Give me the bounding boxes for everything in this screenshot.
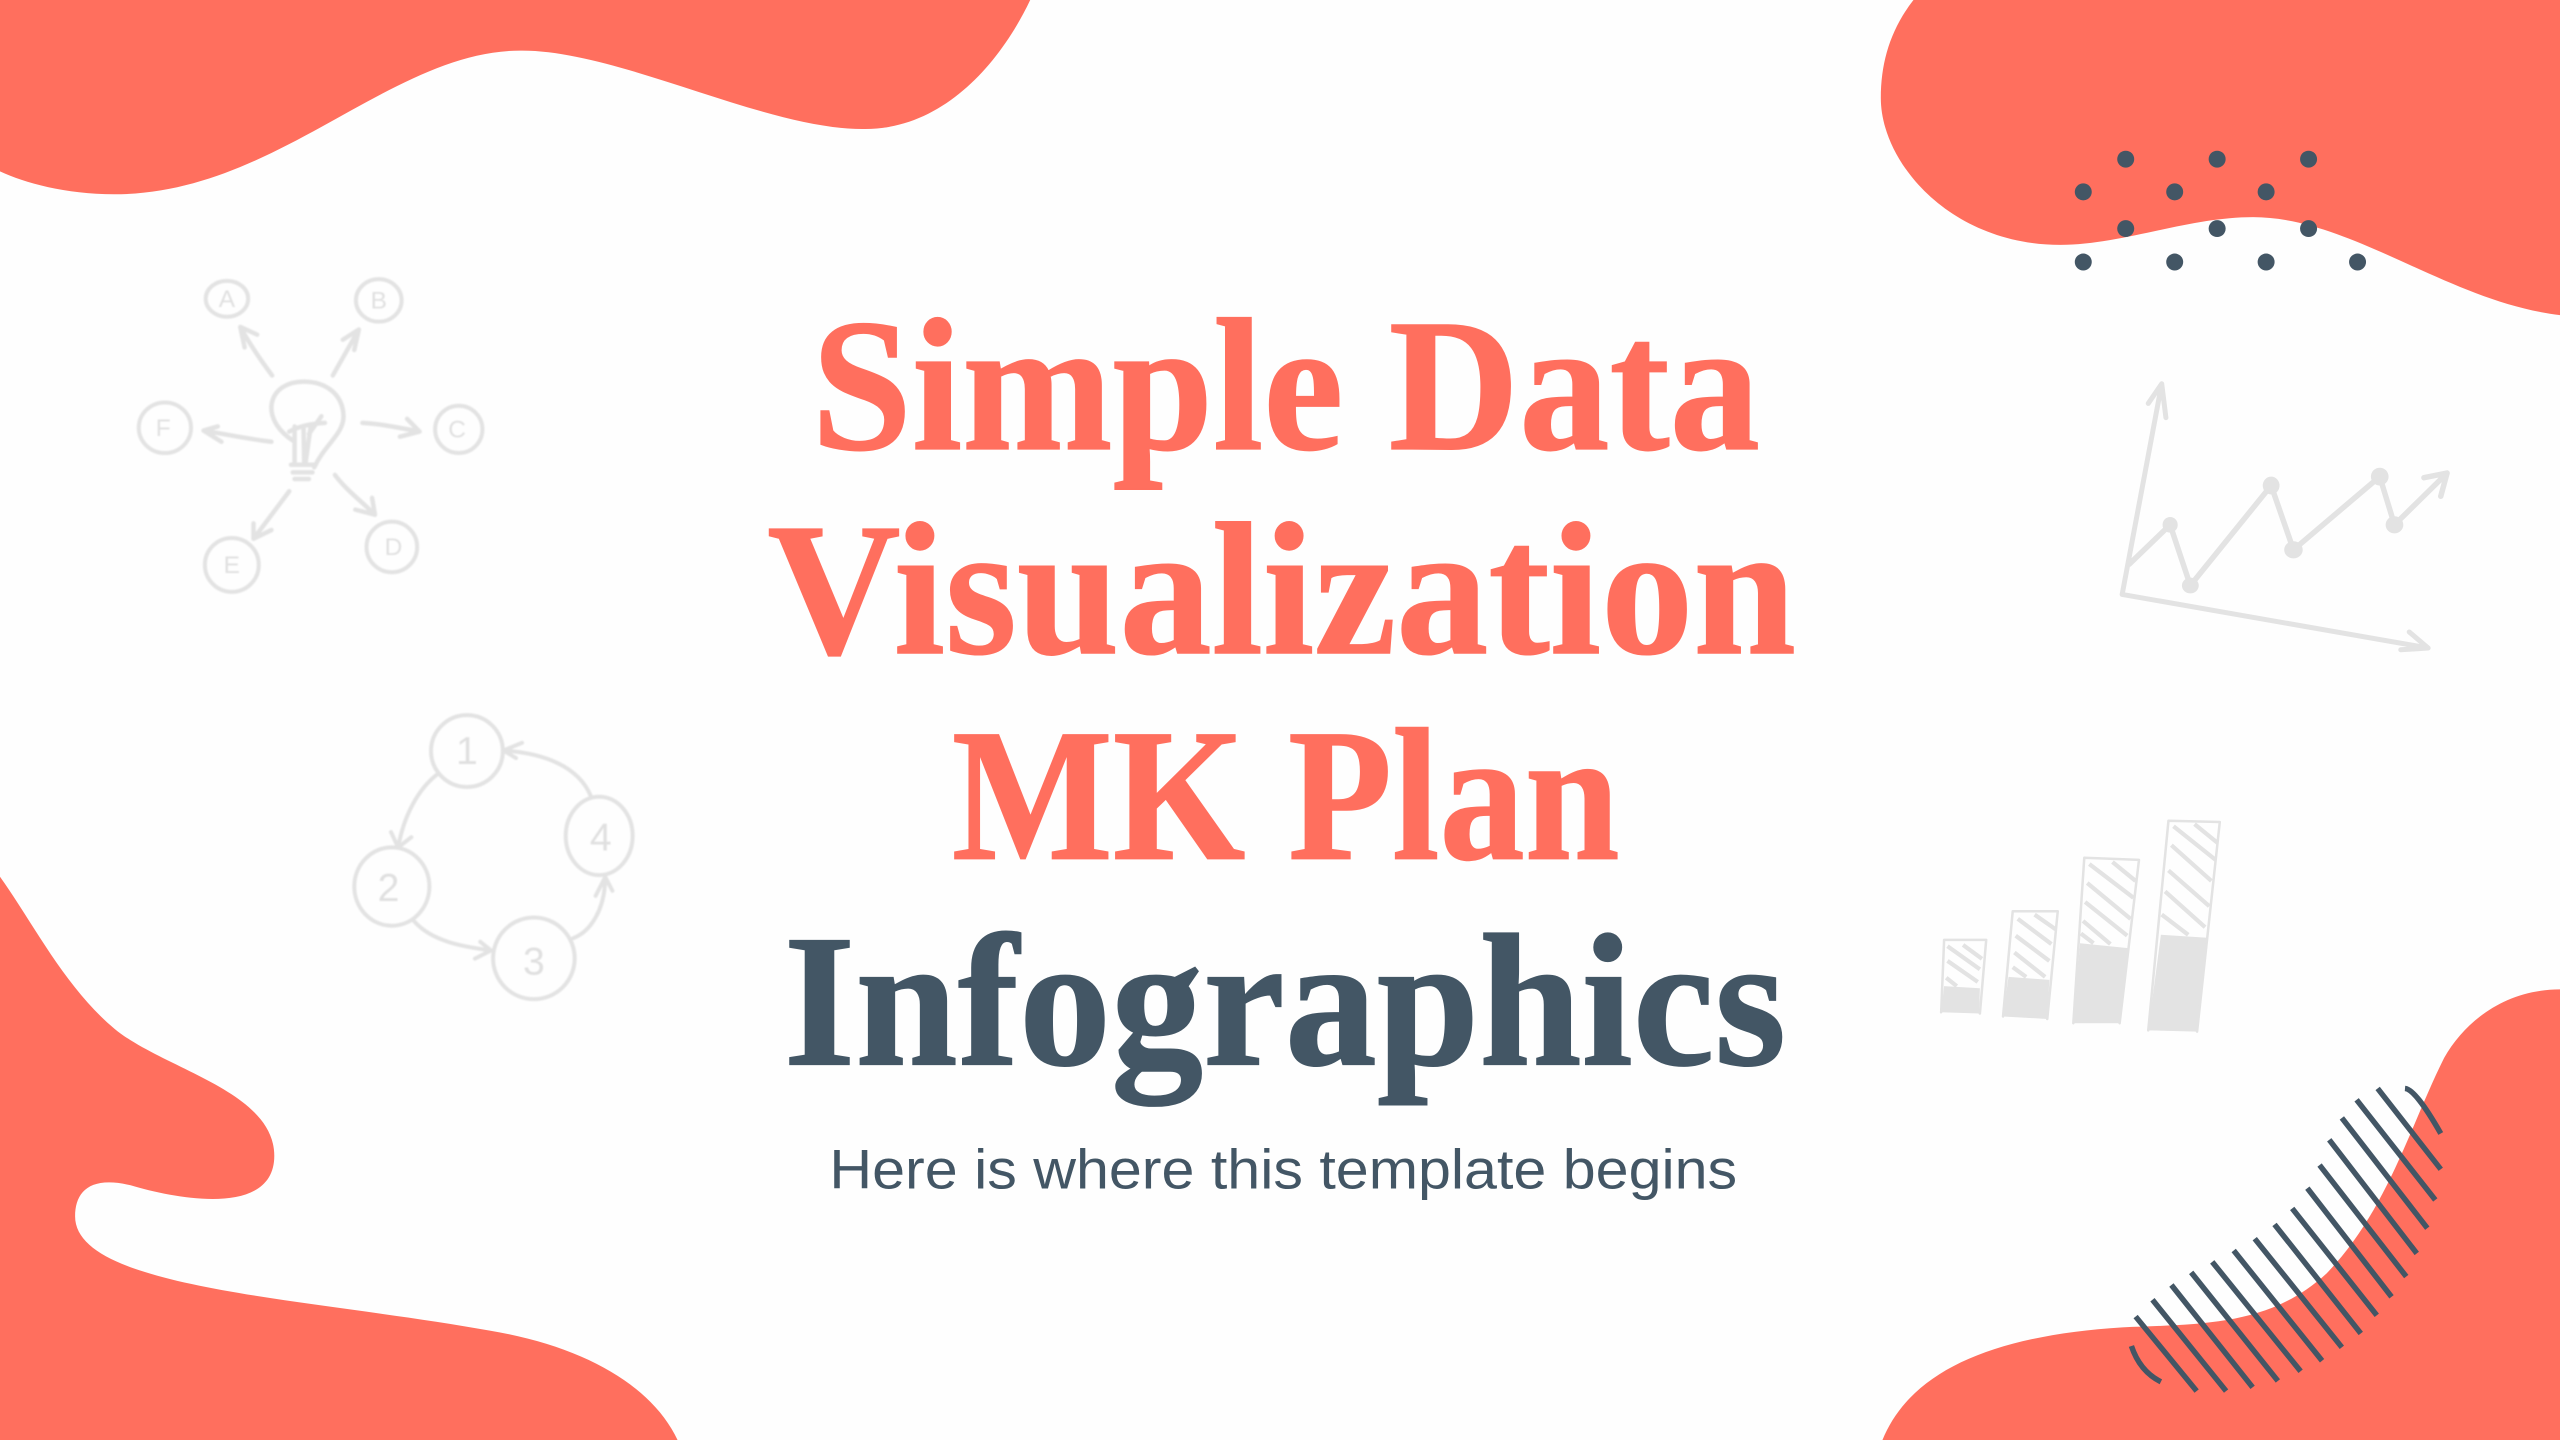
title line: Visualization: Visualization (767, 484, 1796, 694)
sketch icon: cycle 1-4: 1 (456, 730, 478, 773)
nodes: D (385, 534, 402, 561)
title line: Infographics: Infographics (784, 895, 1786, 1106)
sketch icon: idea bulb with A-F arrows (139, 279, 482, 592)
blob: top right (1881, 0, 2560, 315)
dot grid pattern (2075, 151, 2366, 271)
sketch icon: line chart (2122, 384, 2447, 650)
nodes (139, 279, 482, 592)
striped pattern (2131, 1088, 2441, 1391)
blob: top left (0, 0, 1030, 194)
nodes: B (371, 288, 387, 315)
subtitle: Here is where this template begins (829, 1139, 1737, 1201)
title (767, 280, 1796, 1106)
bulb and arrows (204, 327, 420, 539)
title line: MK Plan: MK Plan (952, 690, 1620, 900)
blob: bottom left (0, 877, 678, 1440)
sketch icon: cycle 1-4: 4 (590, 817, 612, 860)
title line: Simple Data: Simple Data (811, 280, 1760, 490)
sketch icon: cycle 1-4: 3 (523, 941, 545, 984)
nodes: C (448, 417, 466, 444)
sketch icon: cycle 1-4: 2 (378, 867, 399, 910)
sketch icon: bar chart (1941, 821, 2220, 1032)
blob: bottom right (1882, 989, 2560, 1440)
nodes: A (219, 286, 236, 313)
nodes: E (224, 552, 240, 579)
nodes: F (156, 415, 171, 442)
sketch icon: cycle 1-4 (354, 715, 633, 999)
